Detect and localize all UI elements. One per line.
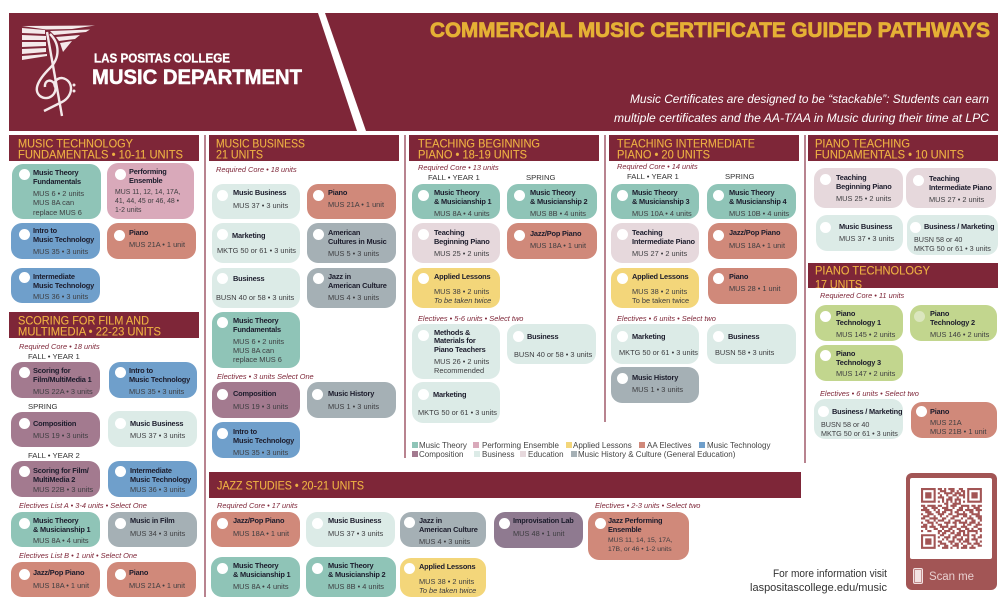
heading bbox=[409, 135, 599, 161]
panel: piano teaching fundamentals bbox=[808, 135, 998, 255]
card: Jazz in bbox=[328, 272, 351, 280]
panel: piano technology bbox=[808, 263, 998, 439]
card: MUS 1 • 3 units bbox=[632, 384, 683, 394]
card: Business bbox=[233, 274, 264, 282]
card: Teaching bbox=[434, 228, 464, 236]
heading: FUNDAMENTALS • 10-11 UNITS bbox=[18, 147, 183, 161]
label: Electives • 6 units • Select two bbox=[617, 314, 716, 323]
card: Piano bbox=[930, 308, 949, 318]
card: Intermediate bbox=[130, 466, 172, 474]
card: Jazz/Pop Piano bbox=[233, 516, 284, 524]
header banner bbox=[9, 13, 998, 131]
card bbox=[814, 168, 903, 208]
card: MKTG 50 or 61 • 3 units bbox=[619, 348, 698, 356]
label: Required Core • 14 units bbox=[617, 162, 698, 171]
label: Requiered Core • 11 units bbox=[820, 291, 904, 300]
card: Marketing bbox=[433, 390, 466, 398]
legend item: Composition bbox=[419, 450, 463, 459]
heading: PIANO • 20 UNITS bbox=[617, 147, 710, 161]
panel: scoring for film and multimedia bbox=[9, 312, 199, 597]
legend item: Education bbox=[528, 450, 564, 459]
card: Music Technology bbox=[233, 436, 294, 444]
label: FALL • YEAR 1 bbox=[627, 172, 679, 181]
card: Business bbox=[728, 332, 759, 340]
card: Fundamentals bbox=[233, 324, 281, 334]
legend item: Business bbox=[482, 450, 514, 459]
card bbox=[107, 163, 194, 219]
card: MUS 22B • 3 units bbox=[33, 484, 93, 494]
icon: music clef logo bbox=[22, 26, 95, 116]
card: MUS 11, 12, 14, 17A, bbox=[115, 188, 180, 196]
card: Piano bbox=[930, 406, 949, 416]
card: MUS 35 • 3 units bbox=[129, 386, 184, 396]
logo text bbox=[92, 52, 302, 88]
card: Music Theory bbox=[729, 188, 774, 196]
card: MUS 8A can bbox=[33, 198, 74, 207]
card: MUS 25 • 2 units bbox=[434, 248, 489, 258]
card: Film/MultiMedia 1 bbox=[33, 374, 92, 384]
card bbox=[707, 324, 796, 364]
card: To be taken twice bbox=[632, 296, 689, 304]
card bbox=[307, 184, 396, 219]
card bbox=[910, 305, 997, 341]
card bbox=[307, 382, 396, 418]
card: & Musicianship 1 bbox=[33, 525, 90, 534]
card: Ensemble bbox=[608, 524, 641, 534]
card: MultiMedia 2 bbox=[33, 474, 75, 484]
card: MUS 8A • 4 units bbox=[233, 582, 289, 590]
legend item: Music Technology bbox=[707, 441, 770, 450]
label: Required Core • 18 units bbox=[216, 165, 297, 174]
card: Music Theory bbox=[632, 188, 677, 196]
QR code panel bbox=[906, 473, 997, 590]
card bbox=[814, 399, 903, 439]
card: American bbox=[328, 228, 360, 236]
card: 1-2 units bbox=[115, 206, 141, 214]
label: SPRING bbox=[725, 172, 754, 181]
card: Music Theory bbox=[233, 560, 278, 570]
card: replace MUS 6 bbox=[33, 208, 82, 216]
card: & Musicianship 1 bbox=[434, 196, 492, 206]
label: Required Core • 17 units bbox=[217, 501, 298, 510]
card: MKTG 50 or 61 • 3 units bbox=[914, 244, 991, 252]
card bbox=[109, 362, 197, 398]
card bbox=[815, 305, 903, 341]
card: MUS 37 • 3 units bbox=[839, 234, 894, 242]
card: Music Business bbox=[839, 222, 892, 230]
card: replace MUS 6 bbox=[233, 354, 282, 364]
card bbox=[306, 557, 396, 597]
legend item: Performing Ensemble bbox=[482, 441, 559, 450]
card: Materials for bbox=[434, 336, 476, 345]
card bbox=[507, 223, 597, 259]
card: Technology 1 bbox=[836, 318, 881, 326]
card: BUSN 58 or 40 bbox=[821, 420, 869, 428]
card: Business bbox=[527, 332, 558, 340]
card: MUS 6 • 2 units bbox=[233, 336, 284, 346]
card bbox=[412, 184, 500, 219]
card: MUS 38 • 2 units bbox=[632, 286, 687, 296]
card bbox=[412, 382, 500, 423]
panel: music business bbox=[209, 135, 399, 458]
card: MUS 11, 14, 15, 17A, bbox=[608, 536, 672, 544]
label: Electives • 2-3 units • Select two bbox=[595, 501, 700, 510]
heading: TEACHING INTERMEDIATE bbox=[617, 136, 755, 150]
card bbox=[400, 558, 486, 597]
card bbox=[611, 324, 699, 364]
icon: phone bbox=[913, 568, 923, 584]
card: Fundamentals bbox=[33, 176, 81, 186]
heading: TEACHING BEGINNING bbox=[418, 136, 540, 150]
card: MUS 27 • 2 units bbox=[929, 194, 984, 204]
card: Teaching bbox=[929, 174, 959, 182]
card: Piano bbox=[328, 188, 347, 196]
card bbox=[11, 512, 100, 547]
card bbox=[108, 411, 197, 447]
card bbox=[907, 215, 998, 255]
card bbox=[588, 512, 689, 560]
card bbox=[211, 557, 300, 597]
card: Ensemble bbox=[129, 176, 162, 184]
card: Marketing bbox=[232, 230, 265, 240]
heading: FUNDAMENTALS • 10 UNITS bbox=[815, 147, 964, 161]
card bbox=[11, 362, 100, 398]
card: MUS 8A can bbox=[233, 346, 274, 354]
card: MUS 38 • 2 units bbox=[434, 286, 489, 296]
card: MUS 18A • 1 unit bbox=[530, 240, 586, 250]
card: Music Technology bbox=[33, 234, 94, 244]
card bbox=[494, 512, 583, 548]
card: MUS 145 • 2 units bbox=[836, 330, 895, 338]
card bbox=[816, 215, 903, 251]
label: SPRING bbox=[526, 173, 555, 182]
legend item: Applied Lessons bbox=[573, 441, 632, 450]
card: MUS 4 • 3 units bbox=[419, 536, 470, 546]
card: Piano bbox=[129, 568, 148, 576]
heading: JAZZ STUDIES • 20-21 UNITS bbox=[217, 478, 364, 492]
card: Composition bbox=[233, 388, 276, 398]
card: MUS 37 • 3 units bbox=[233, 200, 288, 210]
card: MUS 26 • 2 units bbox=[434, 356, 489, 366]
card: MUS 25 • 2 units bbox=[836, 194, 891, 202]
card: MUS 6 • 2 units bbox=[33, 188, 84, 198]
heading: MUSIC BUSINESS bbox=[216, 136, 305, 150]
card: MUS 28 • 1 unit bbox=[729, 284, 780, 292]
label: Electives • 5-6 units • Select two bbox=[418, 314, 523, 323]
card: & Musicianship 2 bbox=[328, 570, 386, 578]
card: Beginning Piano bbox=[836, 182, 892, 190]
label: Required Core • 13 units bbox=[418, 163, 499, 172]
heading bbox=[9, 312, 199, 338]
title: COMMERCIAL MUSIC CERTIFICATE GUIDED PATHWAYS bbox=[430, 19, 990, 42]
card: BUSN 58 • 3 units bbox=[715, 348, 774, 356]
card: MUS 146 • 2 units bbox=[930, 330, 989, 338]
card: MUS 36 • 3 units bbox=[130, 484, 185, 494]
panel: music technology fundamentals bbox=[9, 135, 199, 303]
card: Music Technology bbox=[130, 474, 191, 484]
label: FALL • YEAR 1 bbox=[428, 173, 480, 182]
card: MUS 48 • 1 unit bbox=[513, 528, 564, 538]
card: Music Business bbox=[233, 188, 286, 196]
card bbox=[507, 184, 597, 219]
white diagonal slash bbox=[318, 13, 366, 131]
card: Music Theory bbox=[328, 560, 373, 570]
card: BUSN 40 or 58 • 3 units bbox=[216, 292, 294, 302]
card: MUS 8A • 4 units bbox=[434, 208, 490, 218]
card: & Musicianship 3 bbox=[632, 196, 690, 206]
card: Music Business bbox=[328, 516, 381, 524]
legend bbox=[412, 441, 770, 459]
heading: PIANO • 18-19 UNITS bbox=[418, 147, 527, 161]
card: MUS 36 • 3 units bbox=[33, 292, 88, 300]
card: MUS 18A • 1 unit bbox=[33, 580, 89, 590]
card: MKTG 50 or 61 • 3 units bbox=[821, 428, 898, 438]
card bbox=[906, 168, 996, 208]
card: To be taken twice bbox=[434, 296, 491, 304]
heading bbox=[209, 472, 801, 498]
card: MUS 147 • 2 units bbox=[836, 368, 895, 378]
card: Piano bbox=[836, 308, 855, 318]
card: MUS 21B • 1 unit bbox=[930, 426, 986, 436]
card: MUS 35 • 3 units bbox=[33, 246, 88, 256]
card: Music Theory bbox=[33, 168, 78, 176]
card bbox=[611, 223, 699, 263]
card: Teaching bbox=[836, 172, 866, 182]
card bbox=[212, 382, 300, 418]
card bbox=[507, 324, 596, 364]
card: MUS 19 • 3 units bbox=[233, 402, 288, 410]
heading bbox=[808, 135, 998, 161]
label: FALL • YEAR 2 bbox=[28, 451, 80, 460]
card bbox=[412, 268, 500, 308]
card: Technology 3 bbox=[836, 358, 881, 366]
card: Teaching bbox=[632, 228, 662, 236]
label: SPRING bbox=[28, 402, 57, 411]
heading: SCORING FOR FILM AND bbox=[18, 313, 149, 327]
card: MKTG 50 or 61 • 3 units bbox=[217, 246, 296, 254]
card: MUS 38 • 2 units bbox=[419, 576, 474, 586]
card: MUS 19 • 3 units bbox=[33, 430, 88, 440]
card: Scoring for Film/ bbox=[33, 466, 89, 474]
card bbox=[11, 223, 100, 259]
logo text: LAS POSITAS COLLEGE bbox=[94, 52, 230, 66]
QR code bbox=[910, 478, 992, 559]
card bbox=[11, 268, 100, 303]
scan me label: Scan me bbox=[929, 571, 974, 583]
card bbox=[815, 345, 903, 381]
card: Jazz/Pop Piano bbox=[33, 568, 84, 576]
more information text bbox=[750, 568, 888, 594]
card: Applied Lessons bbox=[434, 272, 490, 280]
card: MUS 22A • 3 units bbox=[33, 386, 93, 396]
card: Music Technology bbox=[129, 374, 190, 384]
card bbox=[12, 164, 101, 219]
card bbox=[212, 268, 300, 308]
card: Marketing bbox=[632, 332, 665, 340]
card bbox=[107, 223, 196, 259]
card bbox=[212, 184, 300, 219]
more information text: laspositascollege.edu/music bbox=[750, 582, 888, 594]
card bbox=[11, 562, 100, 597]
card: Music Theory bbox=[434, 188, 479, 196]
card bbox=[212, 312, 300, 368]
card bbox=[212, 223, 300, 263]
card: & Musicianship 2 bbox=[530, 196, 588, 206]
card bbox=[400, 512, 486, 547]
card: 17B, or 46 • 1-2 units bbox=[608, 546, 672, 552]
card bbox=[108, 512, 197, 547]
label: Electives List A • 3-4 units • Select One bbox=[19, 501, 147, 510]
card: American Culture bbox=[328, 280, 387, 290]
card bbox=[108, 461, 197, 497]
card: Applied Lessons bbox=[419, 562, 475, 570]
card: Piano Teachers bbox=[434, 344, 486, 354]
card: Technology 2 bbox=[930, 318, 975, 326]
heading: PIANO TECHNOLOGY bbox=[815, 263, 930, 277]
card: Piano bbox=[729, 272, 748, 280]
card bbox=[11, 461, 100, 497]
card: MUS 4 • 3 units bbox=[328, 292, 379, 302]
card bbox=[611, 268, 699, 308]
heading: MULTIMEDIA • 22-23 UNITS bbox=[18, 324, 161, 338]
legend item: AA Electives bbox=[647, 441, 691, 450]
card: Music Theory bbox=[233, 316, 278, 324]
card: Jazz in bbox=[419, 516, 442, 524]
card bbox=[412, 223, 500, 263]
intro text bbox=[614, 92, 989, 125]
card: Intro to bbox=[33, 226, 57, 234]
card: MUS 8B • 4 units bbox=[530, 208, 586, 218]
legend item: Music History & Culture (General Education) bbox=[578, 450, 735, 459]
card: Jazz/Pop Piano bbox=[530, 228, 581, 238]
card: MUS 10A • 4 units bbox=[632, 208, 692, 218]
panel: jazz studies bbox=[209, 472, 801, 597]
card: 41, 44, 45 or 46, 48 • bbox=[115, 198, 179, 204]
card: Applied Lessons bbox=[632, 272, 688, 280]
card: MUS 21A bbox=[930, 418, 962, 426]
card: MKTG 50 or 61 • 3 units bbox=[418, 408, 497, 416]
intro text: Music Certificates are designed to be “stackable”: Students can earn bbox=[630, 92, 989, 106]
card: Piano bbox=[129, 228, 148, 236]
card: MUS 5 • 3 units bbox=[328, 248, 379, 258]
card bbox=[306, 512, 395, 547]
card: MUS 1 • 3 units bbox=[328, 402, 379, 410]
card: Jazz/Pop Piano bbox=[729, 228, 780, 236]
card: Music Theory bbox=[33, 516, 78, 525]
label: Required Core • 18 units bbox=[19, 342, 100, 351]
card: To be taken twice bbox=[419, 586, 476, 594]
card: Scoring for bbox=[33, 366, 70, 374]
intro text: multiple certificates and the AA-T/AA in Music during their time at LPC bbox=[614, 111, 989, 125]
heading bbox=[609, 135, 799, 161]
card: MUS 18A • 1 unit bbox=[233, 528, 289, 538]
card bbox=[107, 562, 196, 597]
card bbox=[212, 422, 300, 458]
card: Improvisation Lab bbox=[513, 516, 574, 524]
card: BUSN 58 or 40 bbox=[914, 234, 962, 244]
heading: PIANO TEACHING bbox=[815, 136, 910, 150]
card: American Culture bbox=[419, 524, 478, 534]
card: Recommended bbox=[434, 366, 484, 374]
card: Methods & bbox=[434, 328, 470, 336]
card: Music Theory bbox=[530, 188, 575, 196]
card: Intro to bbox=[233, 426, 257, 436]
card: MUS 21A • 1 unit bbox=[129, 240, 185, 248]
card: Cultures in Music bbox=[328, 236, 387, 246]
card: Business / Marketing bbox=[832, 406, 902, 416]
card: Intermediate Piano bbox=[929, 182, 992, 192]
card: Composition bbox=[33, 418, 76, 428]
card bbox=[708, 223, 797, 259]
card: MUS 37 • 3 units bbox=[130, 430, 185, 440]
card: Music History bbox=[632, 372, 678, 382]
heading: MUSIC TECHNOLOGY bbox=[18, 136, 133, 150]
card bbox=[412, 324, 500, 379]
card: MUS 27 • 2 units bbox=[632, 248, 687, 258]
card: Music in Film bbox=[130, 516, 174, 524]
card bbox=[707, 184, 796, 219]
card: Piano bbox=[836, 348, 855, 358]
card bbox=[11, 412, 100, 447]
card bbox=[211, 512, 300, 547]
card: Music Business bbox=[130, 418, 183, 428]
card: MUS 10B • 4 units bbox=[729, 208, 789, 218]
label: Electives • 3 units Select One bbox=[217, 372, 314, 381]
card: Intermediate bbox=[33, 272, 75, 280]
card: MUS 35 • 3 units bbox=[233, 448, 288, 456]
card: MUS 21A • 1 unit bbox=[129, 580, 185, 590]
panel: teaching beginning piano bbox=[409, 135, 599, 423]
card bbox=[611, 367, 699, 403]
label: FALL • YEAR 1 bbox=[28, 352, 80, 361]
card bbox=[708, 268, 797, 304]
heading: 21 UNITS bbox=[216, 147, 263, 161]
card: Intermediate Piano bbox=[632, 236, 695, 246]
card: MUS 8B • 4 units bbox=[328, 582, 384, 590]
card: Performing bbox=[129, 166, 167, 176]
card: MUS 21A • 1 unit bbox=[328, 200, 384, 208]
label: Electives List B • 1 unit • Select One bbox=[19, 551, 137, 560]
card bbox=[307, 223, 396, 263]
card: Beginning Piano bbox=[434, 236, 490, 246]
card: Music Technology bbox=[33, 280, 94, 290]
card: Music History bbox=[328, 388, 374, 398]
heading bbox=[808, 263, 998, 288]
panel: teaching intermediate piano bbox=[609, 135, 799, 403]
card: MUS 8A • 4 units bbox=[33, 536, 89, 544]
heading bbox=[209, 135, 399, 161]
card: & Musicianship 4 bbox=[729, 196, 786, 206]
card: MUS 37 • 3 units bbox=[328, 528, 383, 538]
card bbox=[611, 184, 699, 219]
label: Electives • 6 units • Select two bbox=[820, 389, 919, 398]
card: MUS 34 • 3 units bbox=[130, 528, 185, 538]
card: MUS 18A • 1 unit bbox=[729, 240, 785, 250]
card bbox=[307, 268, 396, 308]
card: Business / Marketing bbox=[924, 222, 994, 230]
card bbox=[911, 402, 997, 438]
card: Intro to bbox=[129, 366, 153, 374]
card: Jazz Performing bbox=[608, 516, 662, 524]
heading bbox=[9, 135, 199, 161]
card: BUSN 40 or 58 • 3 units bbox=[514, 350, 592, 358]
card: & Musicianship 1 bbox=[233, 570, 290, 578]
legend item: Music Theory bbox=[419, 441, 467, 450]
